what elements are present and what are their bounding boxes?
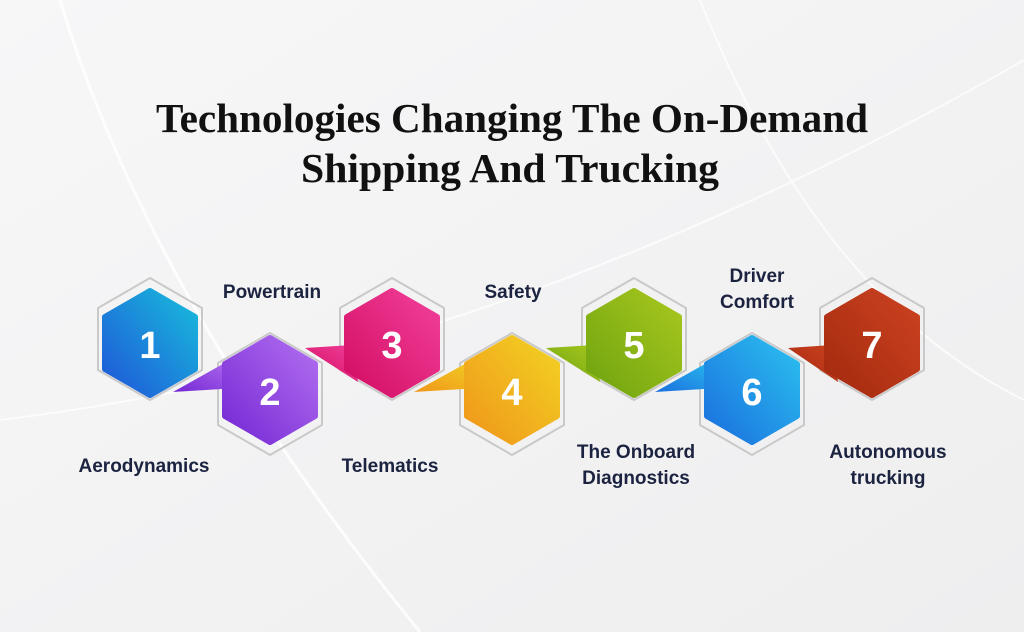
title: Shipping And Trucking: [301, 145, 719, 191]
title: Technologies Changing The On-Demand: [156, 95, 868, 141]
labels: Powertrain: [223, 282, 321, 303]
step 3: [305, 278, 444, 400]
labels: Safety: [484, 282, 542, 303]
labels: Autonomous: [829, 442, 947, 463]
step 4: 4: [501, 372, 523, 414]
labels: The Onboard: [577, 442, 695, 463]
labels: [79, 266, 947, 489]
labels: trucking: [851, 468, 925, 489]
step 5: 5: [623, 325, 645, 367]
labels: Telematics: [342, 456, 438, 477]
step 1: [98, 278, 202, 400]
step 7: [788, 278, 924, 400]
step 1: 1: [139, 325, 161, 367]
step 4: [414, 333, 564, 455]
labels: Diagnostics: [582, 468, 690, 489]
step 6: 6: [741, 372, 763, 414]
step 3: 3: [381, 325, 403, 367]
step 5: [546, 278, 686, 400]
hexagon chain: [98, 278, 924, 455]
labels: Comfort: [720, 292, 795, 313]
title: [156, 95, 868, 191]
step 2: [173, 333, 322, 455]
labels: Driver: [730, 266, 785, 287]
labels: Aerodynamics: [79, 456, 209, 477]
step 2: 2: [259, 372, 281, 414]
step 6: [655, 333, 804, 455]
step 7: 7: [861, 325, 883, 367]
